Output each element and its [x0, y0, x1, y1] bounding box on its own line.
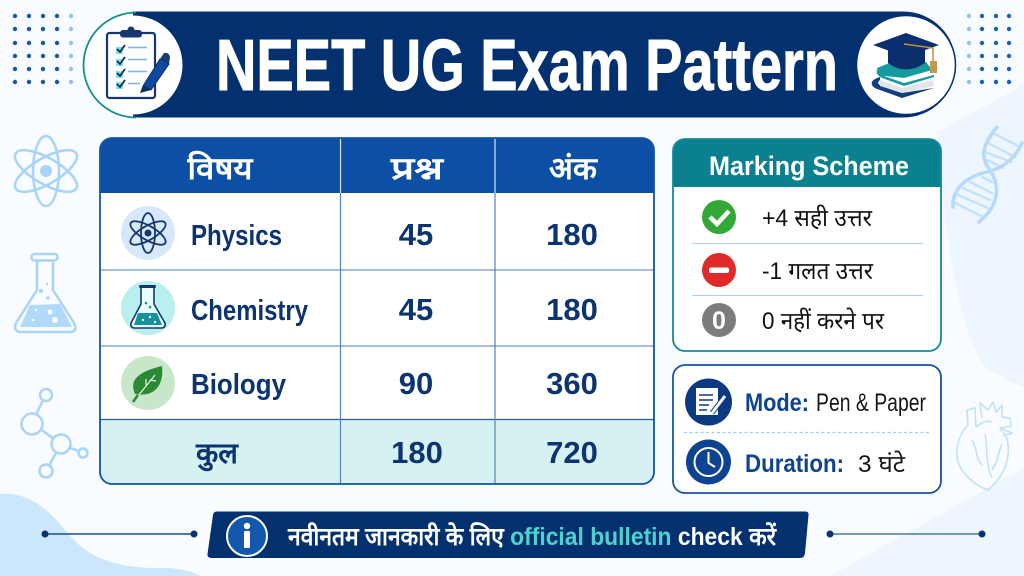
row: total: 720: [546, 435, 598, 470]
footer note: नवीनतम जानकारी के लिए official bulletin check करें: [287, 522, 778, 551]
panel: mode and duration: [673, 365, 941, 493]
decorative icon: heart: [957, 402, 1012, 490]
row: chemistry: [121, 281, 598, 335]
panel: subject table: [100, 138, 654, 484]
marking: not attempted: [702, 303, 885, 337]
row: chemistry: 180: [546, 292, 598, 327]
header banner: [133, 12, 956, 118]
duration row: 3 घंटे: [858, 450, 906, 478]
icon: clipboard checklist: [84, 12, 182, 118]
row: chemistry: Chemistry: [191, 295, 308, 327]
dot grid: top left: [13, 14, 73, 84]
marking: correct answer: +4 सही उत्तर: [762, 204, 873, 232]
panel: marking scheme: [673, 139, 941, 351]
row: biology: Biology: [191, 369, 286, 401]
icon: graduation cap and books: [856, 15, 956, 115]
row: biology: 360: [546, 366, 598, 401]
marking: not attempted: 0 नहीं करने पर: [762, 307, 885, 335]
row: physics: 45: [399, 217, 433, 252]
duration row: [686, 440, 906, 484]
right connector line: [826, 530, 986, 538]
dot grid: top right: [967, 14, 1011, 84]
decorative icon: flask: [15, 254, 75, 332]
decorative icon: atom: [9, 136, 83, 206]
decorative icon: DNA helix: [953, 127, 1022, 222]
row: physics: Physics: [191, 220, 282, 252]
row: physics: [121, 206, 598, 260]
left connector line: [42, 530, 198, 538]
title: NEET UG Exam Pattern: [216, 26, 838, 106]
table header labels: अंक: [549, 151, 598, 186]
mode row: [685, 378, 926, 426]
row: total: कुल: [195, 438, 239, 472]
row: biology: [121, 356, 598, 410]
footer banner: [207, 512, 809, 558]
duration row: Duration:: [745, 450, 844, 478]
row: chemistry: 45: [399, 292, 433, 327]
marking heading: Marking Scheme: [709, 151, 909, 181]
row: total: 180: [391, 435, 443, 470]
icon: information: [227, 516, 267, 556]
table header labels: [186, 150, 598, 186]
row: biology: 90: [399, 366, 433, 401]
mode row: Pen & Paper: [816, 389, 926, 417]
table header labels: विषय: [186, 150, 254, 186]
marking: wrong answer: [702, 253, 874, 287]
marking: wrong answer: -1 गलत उत्तर: [762, 258, 874, 285]
row: physics: 180: [546, 217, 598, 252]
row: total: [195, 435, 598, 472]
table header labels: प्रश्न: [390, 151, 444, 186]
decorative icon: molecule: [22, 389, 88, 478]
marking: not attempted: 0: [712, 307, 726, 335]
marking: correct answer: [702, 200, 873, 234]
mode row: Mode:: [745, 389, 809, 417]
